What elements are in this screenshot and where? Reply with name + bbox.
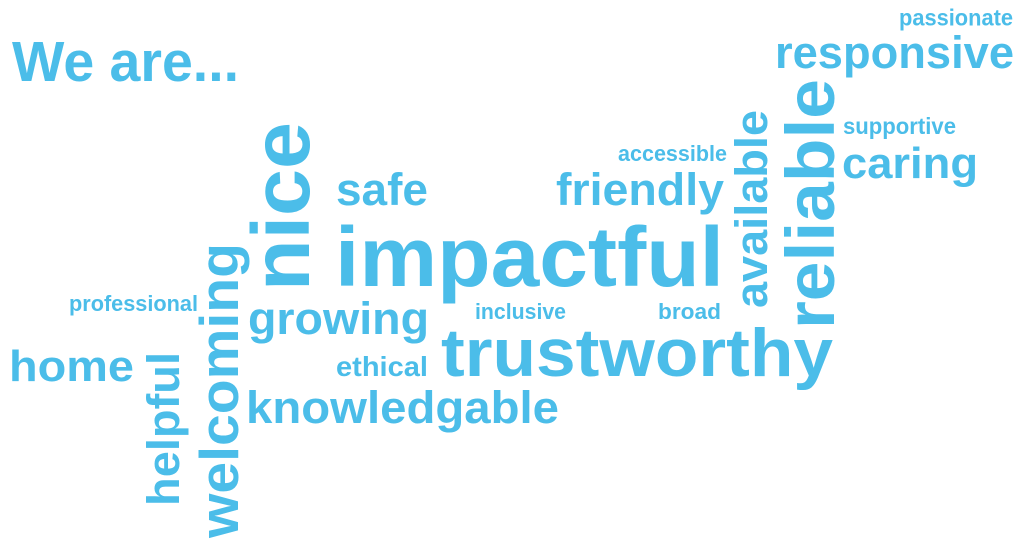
title: We are...	[12, 30, 239, 94]
word: growing: growing	[248, 293, 429, 344]
word: welcoming (vertical): welcoming	[188, 243, 250, 539]
word: impactful: impactful	[335, 210, 724, 304]
word: available (vertical): available	[726, 110, 777, 308]
word: trustworthy: trustworthy	[441, 315, 833, 391]
word: professional: professional	[69, 291, 198, 316]
word: ethical: ethical	[336, 351, 428, 382]
word: responsive: responsive	[775, 27, 1014, 78]
word: broad: broad	[658, 299, 721, 324]
word: accessible: accessible	[618, 141, 727, 166]
word: caring: caring	[842, 139, 978, 188]
word: reliable (vertical): reliable	[772, 79, 849, 329]
word: safe: safe	[336, 164, 428, 215]
word: nice (vertical): nice	[236, 122, 327, 291]
word: inclusive: inclusive	[475, 299, 566, 324]
word: supportive: supportive	[843, 113, 956, 139]
word: passionate: passionate	[899, 4, 1013, 30]
word: friendly: friendly	[556, 164, 724, 215]
word: helpful (vertical): helpful	[138, 352, 189, 506]
word: knowledgable: knowledgable	[246, 382, 559, 433]
word: home: home	[9, 342, 134, 391]
